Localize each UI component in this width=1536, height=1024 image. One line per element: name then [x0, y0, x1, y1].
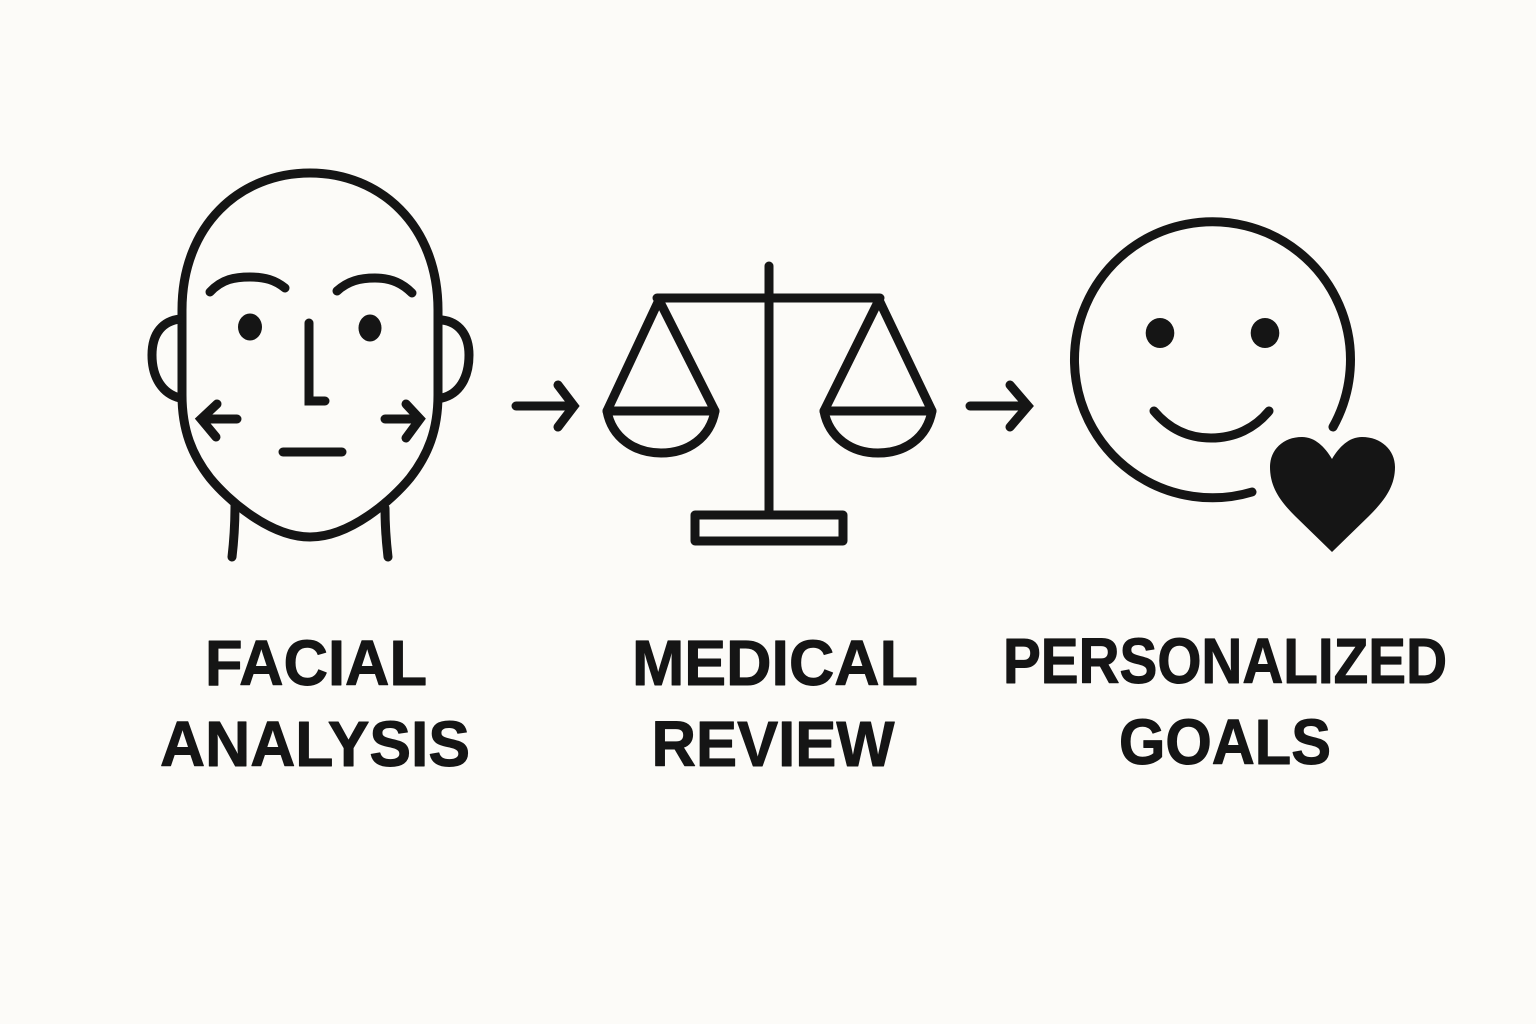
- smile: [1154, 411, 1269, 438]
- right eye: [1251, 318, 1279, 348]
- arrow: scales to smiley: [970, 385, 1028, 427]
- label: facial analysis: ANALYSIS: [160, 708, 470, 780]
- left pan strings: [607, 300, 715, 411]
- label: personalized goals: GOALS: [1119, 706, 1331, 778]
- label: facial analysis: [160, 627, 470, 780]
- label: personalized goals: [1003, 625, 1447, 778]
- face outline: [182, 173, 438, 537]
- scale base: [695, 515, 843, 541]
- right pan strings: [824, 300, 932, 411]
- arrow: face to scales: [516, 385, 574, 427]
- neck right: [385, 508, 388, 557]
- right ear: [442, 320, 469, 398]
- label: facial analysis: FACIAL: [205, 627, 427, 699]
- left arrow: [201, 404, 237, 437]
- icon: balance scales: [607, 266, 932, 541]
- right eye: [358, 314, 382, 342]
- left ear: [152, 319, 180, 398]
- label: medical review: REVIEW: [652, 708, 895, 780]
- left eye: [238, 314, 262, 340]
- left eyebrow: [210, 277, 285, 292]
- right arrow: [385, 404, 420, 438]
- right pan: [824, 411, 932, 453]
- icon: face with measurement arrows: [152, 173, 469, 557]
- right eyebrow: [337, 278, 412, 293]
- label: medical review: MEDICAL: [632, 627, 918, 699]
- left eye: [1146, 318, 1174, 348]
- mouth: [283, 448, 342, 456]
- label: medical review: [632, 627, 918, 780]
- heart: [1270, 437, 1395, 552]
- scale post: [764, 266, 774, 514]
- left pan: [607, 411, 715, 453]
- scale beam: [657, 294, 880, 302]
- smiley outline: [1074, 222, 1350, 498]
- label: personalized goals: PERSONALIZED: [1003, 625, 1447, 697]
- icon: smiley with heart: [1074, 222, 1395, 552]
- neck left: [232, 505, 235, 557]
- nose: [309, 323, 325, 401]
